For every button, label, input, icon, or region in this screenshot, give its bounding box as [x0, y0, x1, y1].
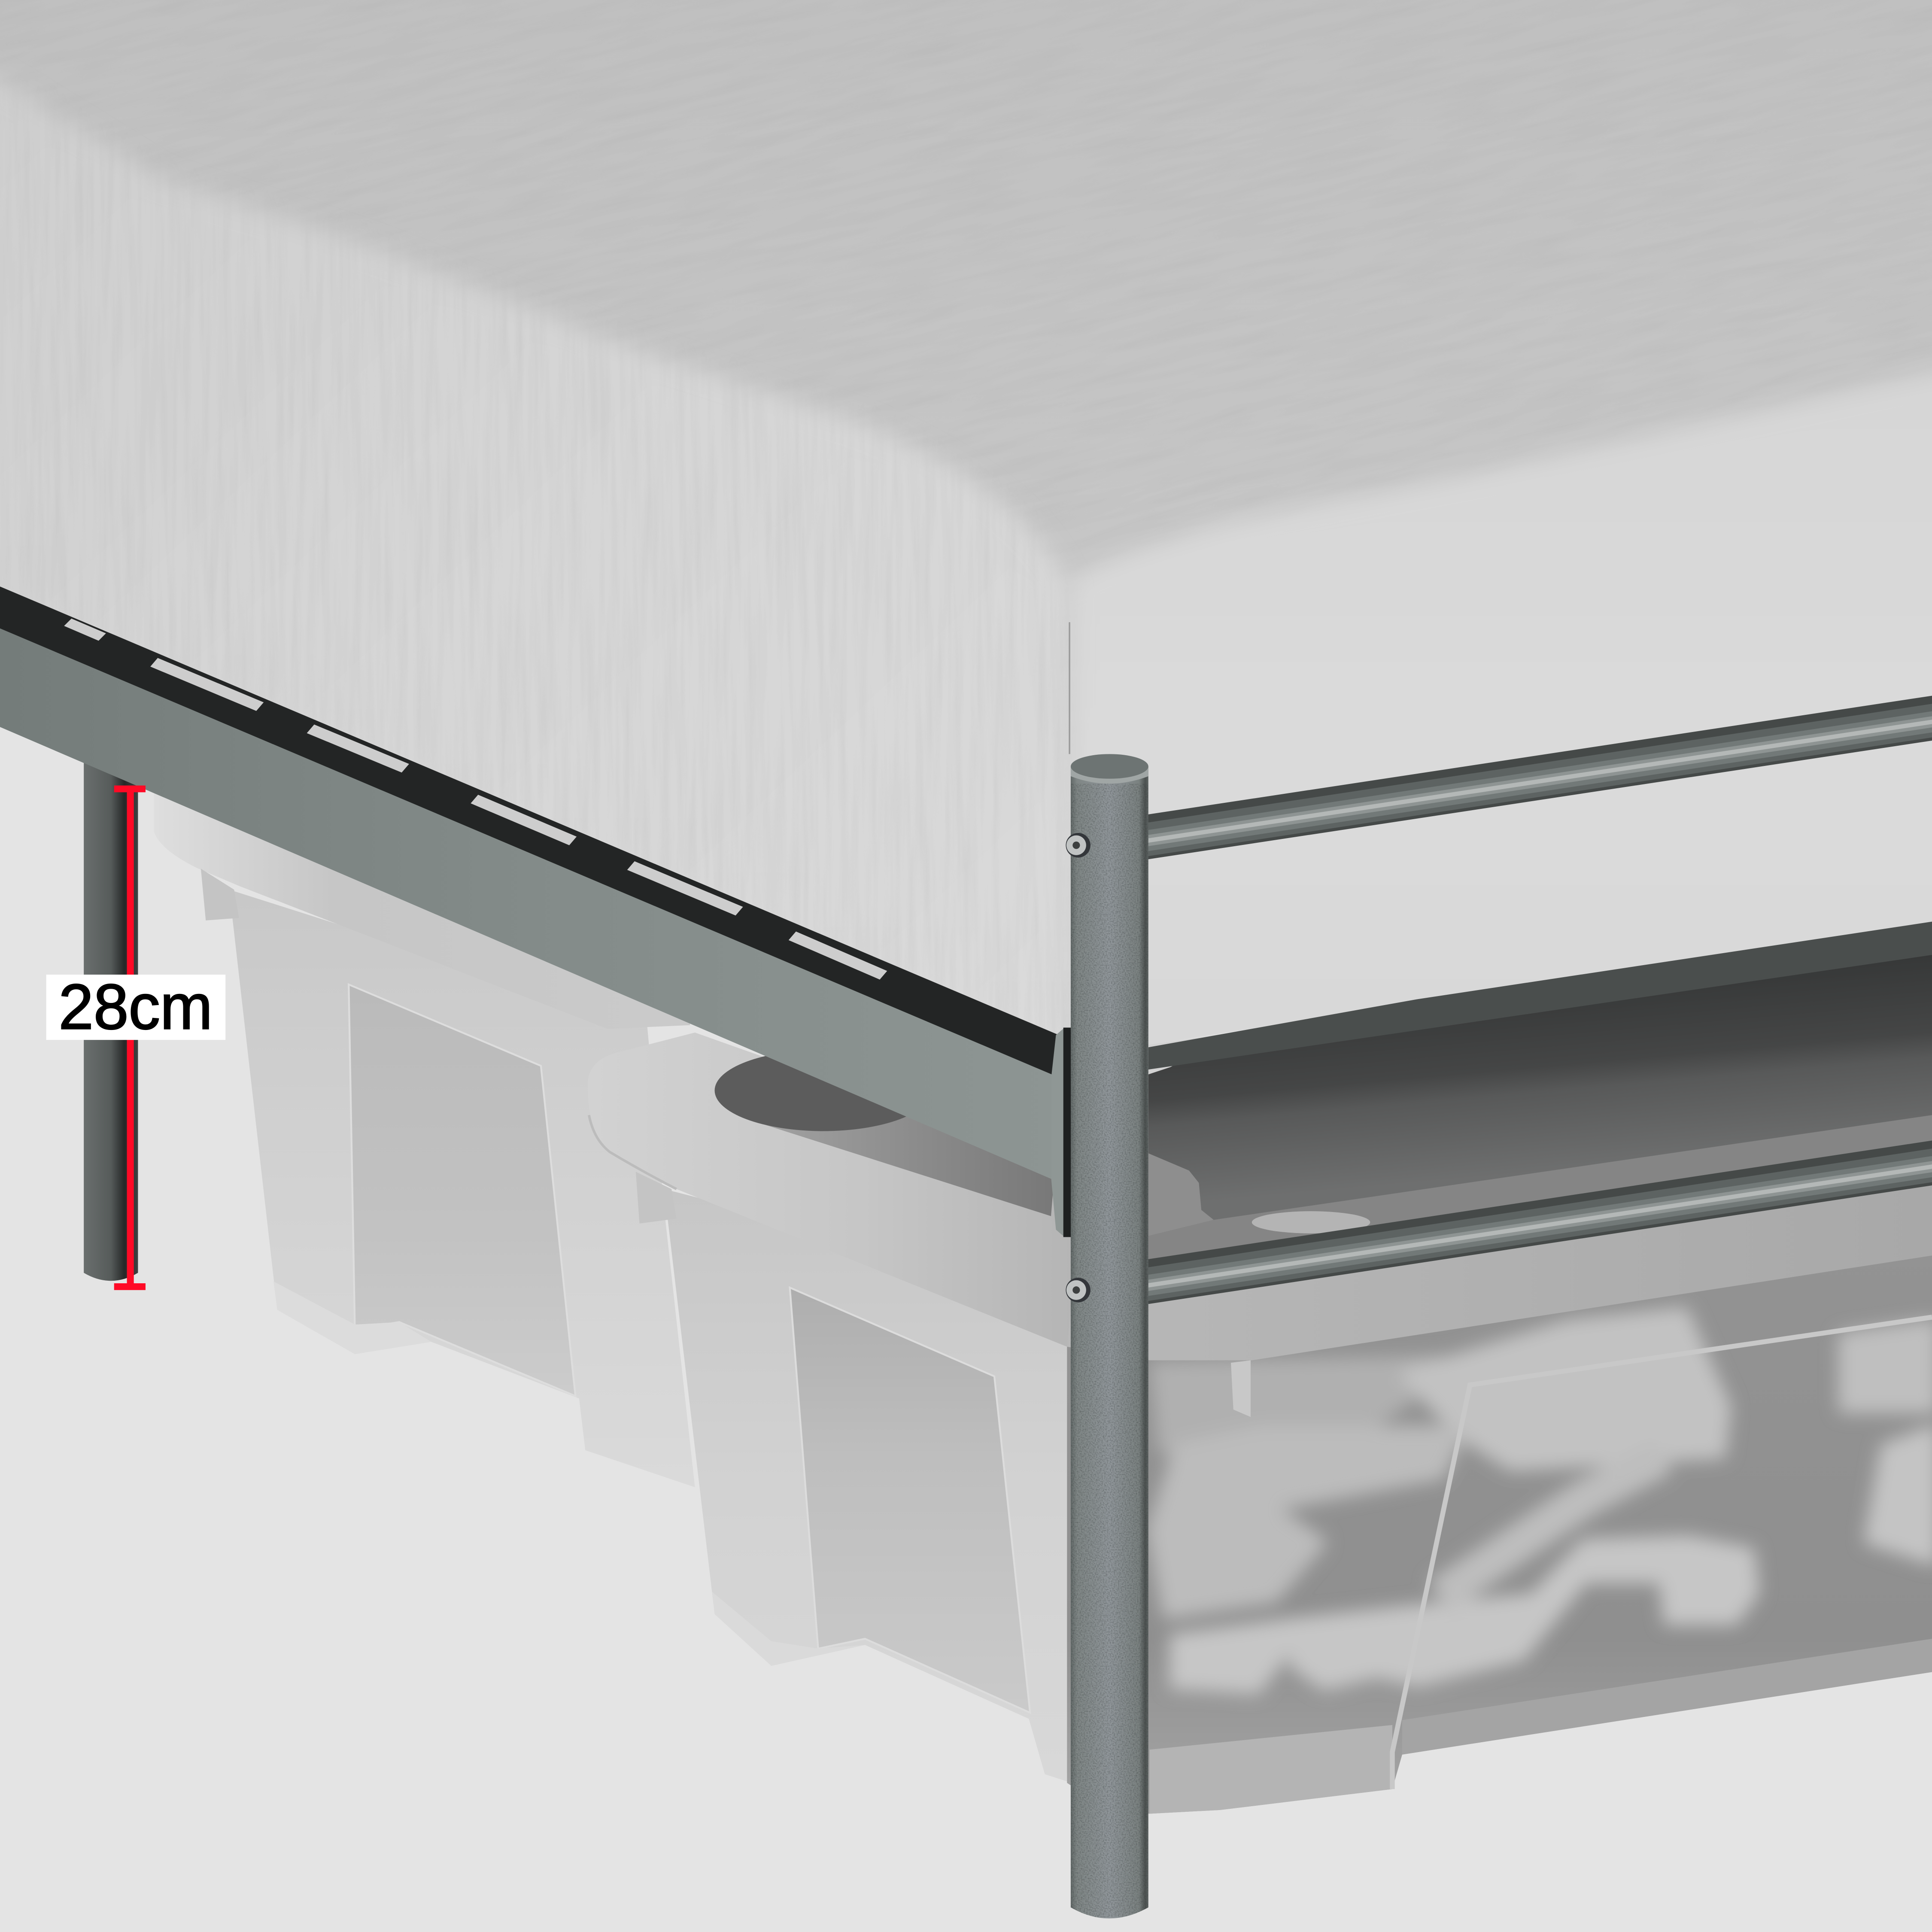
post grain [1071, 784, 1148, 1917]
front bin foot band [712, 1592, 865, 1666]
front bin lid [588, 1033, 1084, 1347]
front bin clip right [1231, 1360, 1251, 1417]
front bin right face [1067, 1232, 1932, 1814]
loose sheet corner [1148, 1033, 1232, 1075]
rail end bracket [1051, 1027, 1065, 1237]
mattress front side [0, 61, 1069, 1109]
post cap [1071, 754, 1148, 779]
interior lid edge [1148, 1115, 1932, 1267]
front bin lower right band [1402, 1639, 1932, 1755]
rail gap [1063, 1027, 1072, 1237]
front storage bin [664, 1189, 1932, 1814]
rear bin clip [201, 869, 239, 920]
bolt lower [1066, 1278, 1091, 1302]
rear bin body [229, 890, 695, 1487]
slats [64, 619, 887, 980]
mattress front folds [0, 80, 1069, 1060]
corner seam [1069, 622, 1070, 754]
height dimension marker [114, 786, 146, 1290]
rear bin foot band [273, 1282, 431, 1354]
front bin left face [664, 1189, 1072, 1783]
front post [1071, 754, 1148, 1918]
interior bin lid corner [1148, 1153, 1214, 1238]
side rail [0, 629, 1072, 1237]
front bin lower band [1150, 1725, 1392, 1814]
lid underside shadow [589, 1115, 677, 1189]
rear bin lip [154, 789, 690, 1029]
lid inner surface [758, 1115, 1055, 1216]
dark interior under mattress [1148, 946, 1932, 1267]
front bin clip left [636, 1172, 677, 1224]
folded clothes [1150, 1313, 1932, 1691]
post cap rim [1071, 766, 1148, 784]
middle cross rail [1148, 922, 1932, 1069]
lower cross rail [1109, 1157, 1932, 1291]
front bin lid right band [1067, 1164, 1932, 1360]
lid recess [715, 1050, 932, 1131]
front bin left window [790, 1288, 1030, 1713]
bolt upper [1066, 833, 1091, 857]
mattress right side [1069, 364, 1932, 1109]
upper cross rail [1109, 712, 1932, 847]
mattress [0, 0, 1932, 1045]
mattress top [0, 0, 1932, 601]
slat band [0, 586, 1065, 1087]
rear storage bin [154, 789, 695, 1487]
height label: 28cm [58, 971, 213, 1042]
front bin right window [1392, 1317, 1932, 1789]
lid silhouette [588, 1033, 1084, 1347]
rear bin window [349, 984, 575, 1396]
rear leg [84, 758, 138, 1281]
interior highlight [1252, 1211, 1370, 1233]
